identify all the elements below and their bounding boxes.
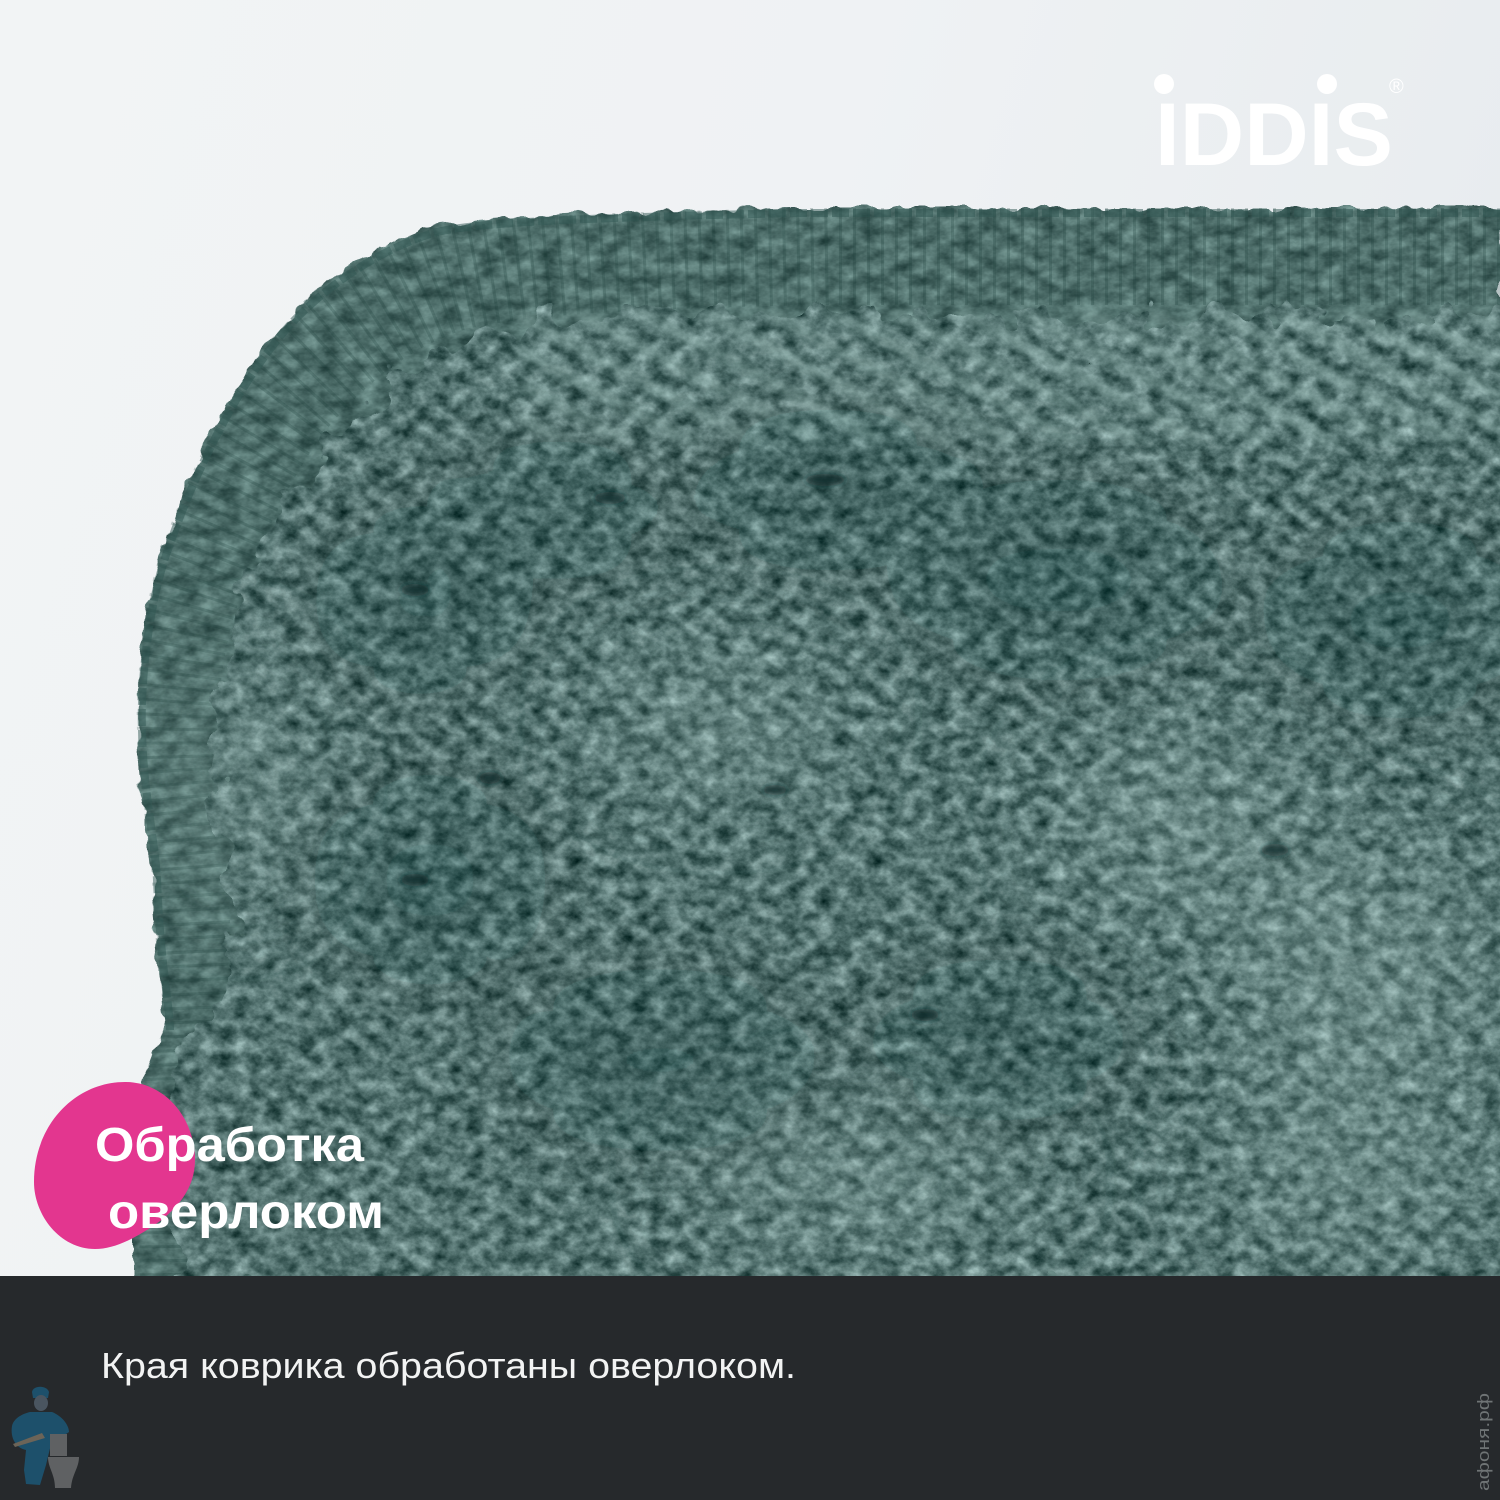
toilet xyxy=(48,1434,79,1488)
callout: pink blob with heading xyxy=(34,1082,384,1249)
logo: IDDIS: ® xyxy=(1389,76,1404,98)
photo: green bath mat with overlocked edge xyxy=(135,208,1500,1290)
bottom bar xyxy=(0,1276,1500,1500)
light diagonal tufts along the top xyxy=(520,312,1500,442)
wrench xyxy=(13,1433,45,1447)
description text: Края коврика обработаны оверлоком. xyxy=(101,1345,796,1386)
heading: оверлоком xyxy=(108,1186,384,1239)
heading: Обработка xyxy=(95,1119,364,1172)
logo: IDDIS: IDDIS xyxy=(1155,84,1393,184)
plush pile xyxy=(175,315,1500,1290)
watermark: site name: афоня.рф xyxy=(1474,1393,1493,1491)
overlock band xyxy=(135,208,1500,1280)
pink blob xyxy=(34,1082,195,1249)
plumber figure xyxy=(12,1387,69,1485)
plumber face xyxy=(34,1395,48,1411)
icon: plumber with toilet watermark xyxy=(12,1387,79,1488)
pile shading xyxy=(190,312,1500,1250)
